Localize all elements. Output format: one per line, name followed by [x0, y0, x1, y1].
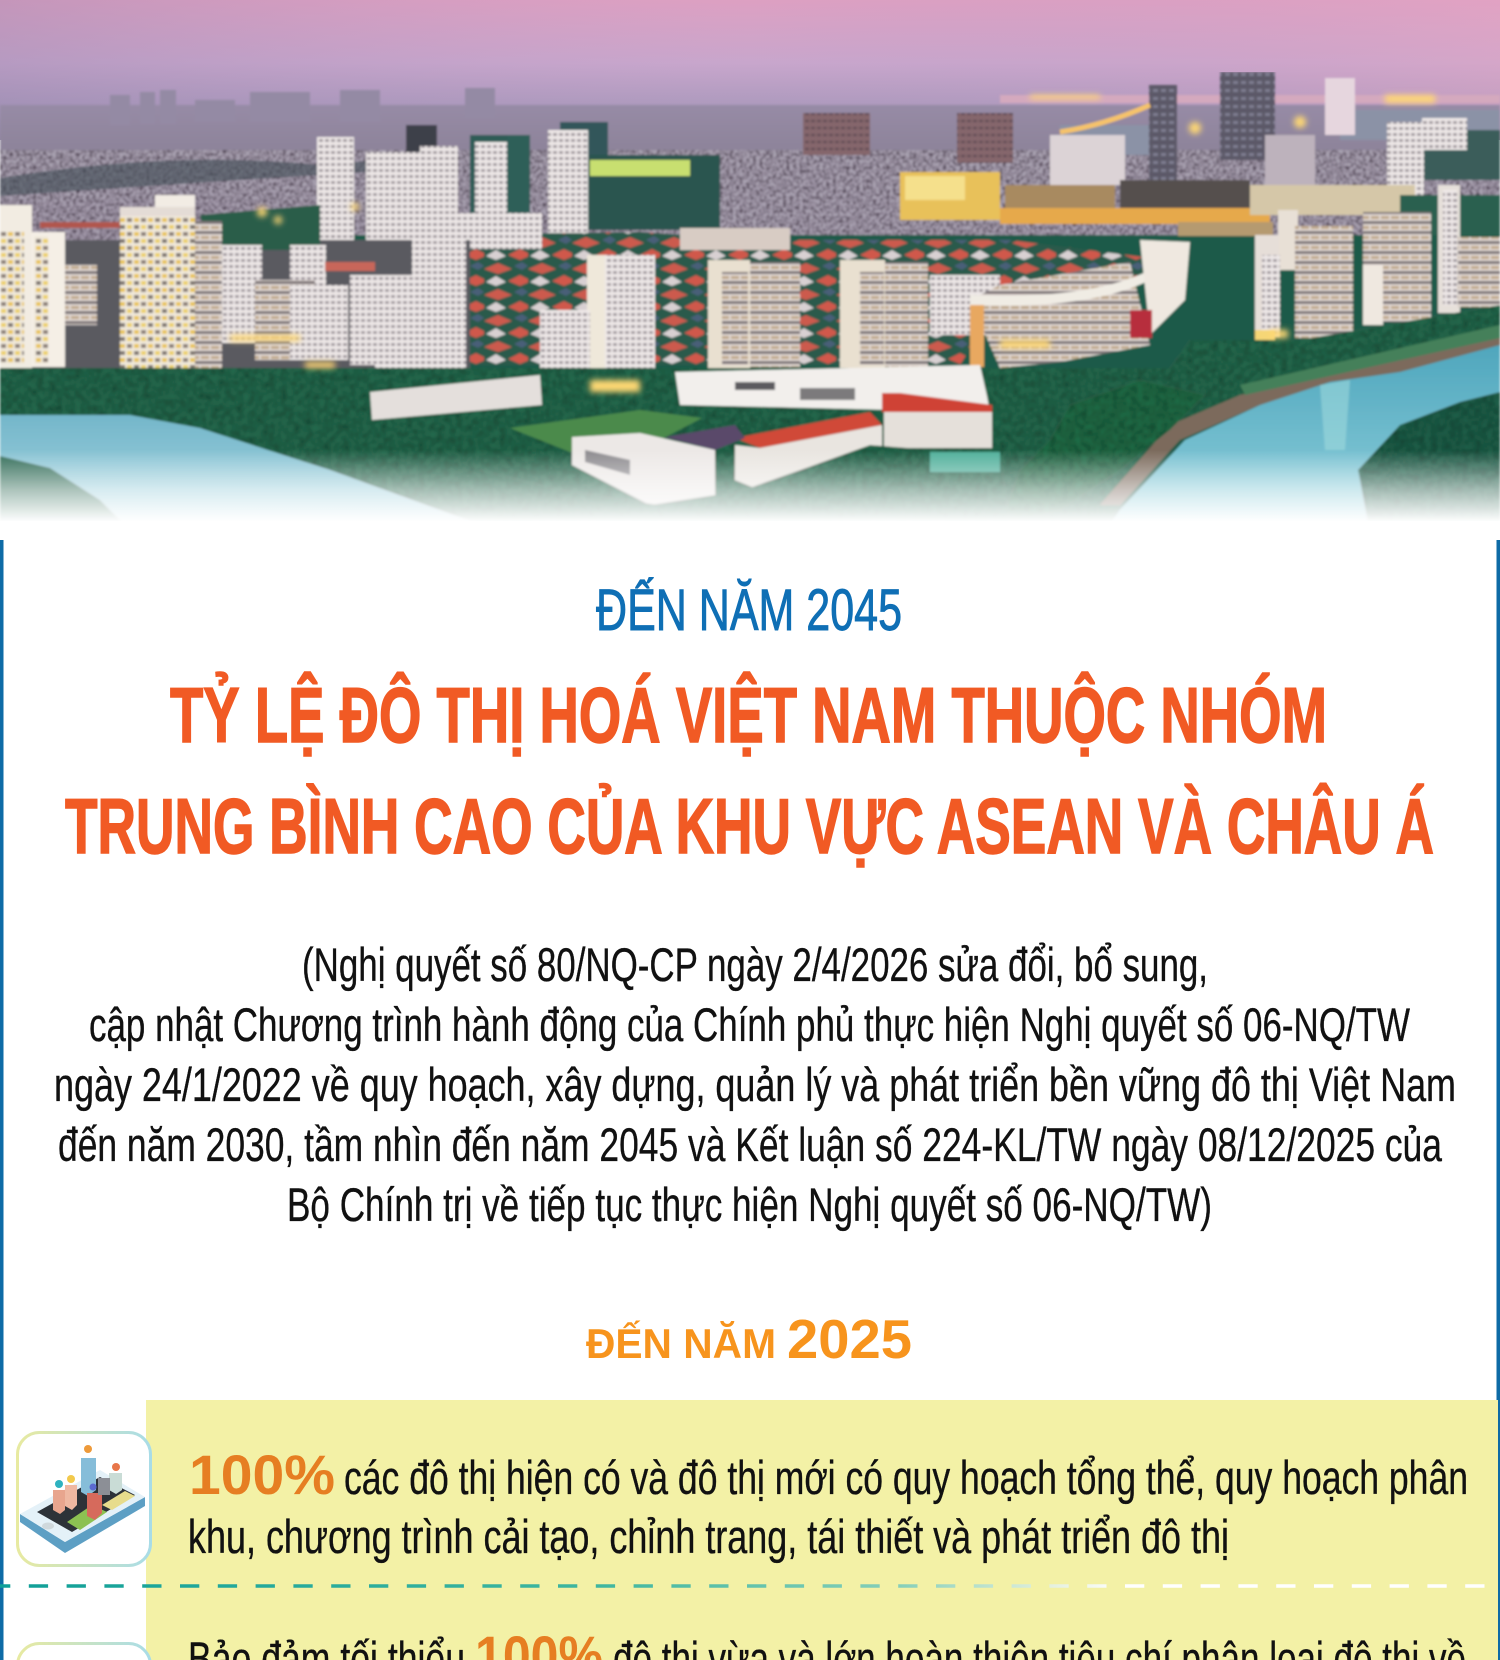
river [1110, 345, 1500, 525]
left blue frame [0, 540, 4, 1660]
section heading: 2025: ĐẾN NĂM [586, 1320, 776, 1367]
apartment towers center [540, 255, 1000, 372]
curved apartment block [970, 240, 1190, 368]
foreground trees [480, 445, 1010, 525]
apartment towers left [0, 195, 466, 377]
icon card 2 (cropped) [18, 1644, 150, 1660]
yellow content panel [146, 1400, 1498, 1660]
red-roof houses [430, 232, 1180, 365]
construction site and mall lights [588, 155, 1500, 236]
right island [1358, 392, 1500, 525]
school: long white building left [370, 375, 542, 420]
school: main white complex [675, 365, 990, 412]
apartment towers right [1255, 185, 1500, 342]
source paragraph [54, 938, 1456, 1231]
riverside greenery and beach [0, 305, 1500, 525]
source paragraph: Bộ Chính trị về tiếp tục thực hiện Nghị quyết số 06-NQ/TW) [287, 1178, 1212, 1231]
right blue frame [1496, 540, 1500, 1660]
icon card: smart city on phone [18, 1432, 150, 1566]
hero photo: city skyline at dusk [0, 0, 1500, 540]
item 1 text: 100% [189, 1443, 335, 1506]
school: red-roof building right [882, 393, 992, 448]
dashed divider [0, 1584, 1500, 1588]
kicker heading: ĐẾN NĂM 2045 [596, 578, 902, 643]
school: front white building [572, 433, 715, 505]
section heading: 2025: 2025 [787, 1308, 912, 1370]
main title [65, 671, 1434, 870]
lake shore island [0, 456, 125, 525]
near white towers [317, 130, 588, 249]
city lights [230, 95, 1435, 392]
ground base [0, 215, 1500, 525]
section heading: 2025 [586, 1308, 912, 1370]
far towers [406, 72, 1467, 225]
school: red-roof diagonal building [665, 412, 882, 490]
source paragraph: (Nghị quyết số 80/NQ-CP ngày 2/4/2026 sửa đổi, bổ sung, [302, 938, 1208, 991]
lake [0, 415, 480, 525]
item 2 text (cropped) [188, 1624, 1466, 1660]
distant city band [0, 88, 1500, 250]
school field [510, 410, 702, 452]
item 1 text [188, 1443, 1468, 1563]
left riverside trees [1000, 380, 1205, 525]
darker ground behind apartment blocks [0, 240, 470, 380]
river reflection [1320, 380, 1350, 450]
